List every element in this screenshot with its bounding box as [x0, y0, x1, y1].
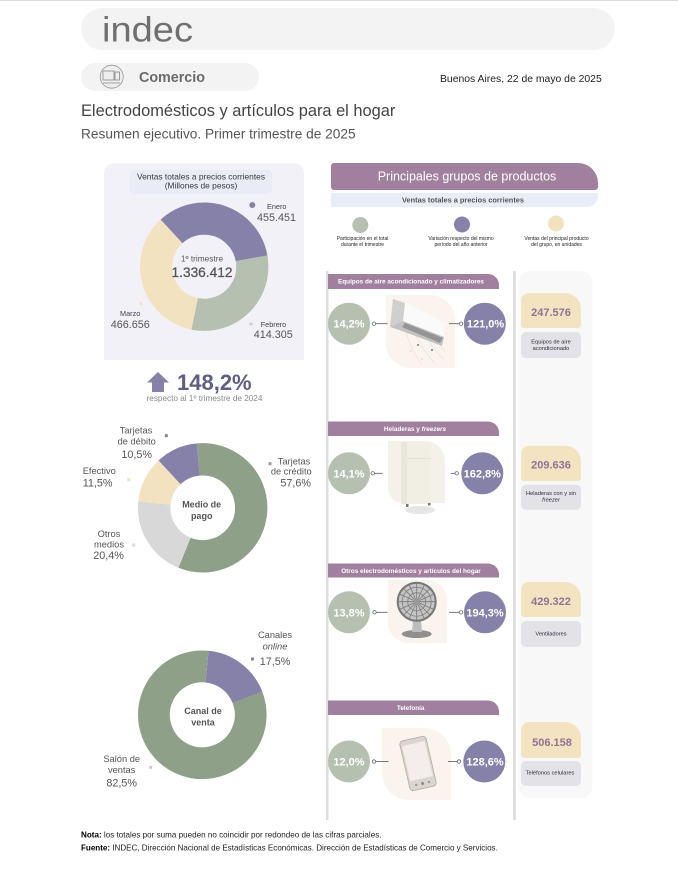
label: online channels: 17,5% [260, 656, 291, 668]
share value: 13,8% [333, 607, 365, 619]
key figure: year over year change [147, 370, 263, 403]
group: refrigerators [328, 422, 581, 514]
share value [328, 591, 370, 633]
product illustration: mobile phone [382, 728, 451, 800]
legend: units [524, 216, 589, 248]
logo: indec: indec [102, 10, 193, 50]
share value [328, 452, 370, 494]
label: debit cards: de débito [118, 436, 156, 446]
share value: 12,0% [333, 756, 365, 768]
unit sales card: 506.158 [532, 737, 572, 749]
connector left [372, 760, 388, 763]
icon: up arrow [147, 372, 169, 392]
share value: 14,1% [333, 468, 365, 480]
label: store sales: Salón de [103, 754, 140, 764]
legend: share [337, 217, 388, 248]
variation value [464, 303, 506, 345]
legend: units: del grupo, en unidades [531, 242, 582, 248]
connector right [448, 760, 461, 763]
unit sales card [521, 722, 581, 758]
label: credit cards: Tarjetas [278, 456, 311, 466]
group heading [328, 700, 499, 715]
variation value [464, 591, 506, 633]
donut center total [172, 254, 232, 280]
connector left [372, 322, 388, 325]
legend: share: Participación en el total [337, 236, 388, 242]
product name card [521, 332, 581, 358]
variation value [463, 740, 505, 782]
legend: variation: período del año anterior [434, 242, 488, 248]
column divider left [326, 271, 328, 820]
share value: 14,2% [333, 319, 365, 331]
group heading: Equipos de aire acondicionado y climatizadores [338, 278, 484, 286]
subtitle: Resumen ejecutivo. Primer trimestre de 2025 [81, 126, 356, 142]
product name card [521, 621, 581, 647]
share value [328, 740, 370, 782]
center label [182, 500, 221, 521]
title: Electrodomésticos y artículos para el hogar [81, 102, 396, 120]
heading: main product groups [331, 163, 598, 190]
source: Fuente: INDEC, Dirección Nacional de Estadísticas Económicas. Dirección de Estadísticas de Comercio y Servicios. [81, 844, 498, 852]
connector right [451, 472, 458, 475]
section tag: Comercio [81, 63, 259, 91]
group heading [328, 564, 499, 578]
date: Buenos Aires, 22 de mayo de 2025 [440, 74, 602, 85]
label: Marzo: 466.656 [111, 319, 150, 331]
variation value [461, 452, 503, 494]
center label: Canal de [184, 706, 222, 716]
growth value: 148,2% [177, 370, 252, 395]
variation value: 162,8% [464, 468, 501, 480]
panel heading: (Millones de pesos) [165, 180, 238, 190]
icon: appliances [100, 65, 123, 88]
label: debit cards [118, 426, 168, 461]
variation value: 194,3% [466, 607, 504, 619]
legend: units: Ventas del principal producto [524, 236, 589, 242]
product name card: Ventiladores [535, 632, 567, 638]
product name card [521, 485, 581, 510]
subheading: total sales: Ventas totales a precios corrientes [402, 196, 524, 204]
product name card [521, 761, 581, 786]
column divider right [513, 271, 516, 820]
donut chart: payment method [83, 426, 312, 576]
unit sales card: 429.322 [531, 596, 571, 608]
group heading: Otros electrodomésticos y artículos del hogar [341, 568, 481, 575]
label: credit cards: 57,6% [280, 478, 311, 490]
group: telephony [328, 700, 581, 800]
panel heading: Ventas totales a precios corrientes [137, 172, 265, 182]
variation value: 121,0% [467, 319, 504, 331]
group heading [328, 422, 499, 436]
label: Enero: 455.451 [257, 212, 296, 224]
label: Enero: Enero [267, 202, 286, 211]
center label: pago [191, 511, 213, 521]
label: cash: 11,5% [83, 478, 113, 490]
product name card: Heladeras con y sin [526, 491, 576, 497]
donut chart: sales channel [103, 630, 292, 790]
group heading: Telefonía [397, 705, 425, 712]
connector left [371, 472, 383, 475]
label: Enero [249, 202, 296, 224]
group: air conditioners [328, 274, 581, 368]
donut chart: monthly sales [136, 199, 272, 335]
label: cash: Efectivo [83, 466, 116, 476]
label: store sales: ventas [108, 765, 136, 775]
product name card: Equipos de aire [531, 340, 571, 346]
label: other: medios [94, 540, 124, 550]
center label: Medio de [182, 500, 221, 510]
group heading: Heladeras y freezers [384, 426, 447, 433]
subheading: total sales [331, 193, 598, 207]
connector right [449, 322, 463, 325]
product illustration: refrigerator [388, 441, 445, 514]
variation value: 128,6% [466, 756, 504, 768]
unit sales card: 209.636 [531, 460, 571, 472]
legend: variation [428, 216, 494, 248]
legend: share: durante el trimestre [341, 242, 384, 248]
footnote: Nota: los totales por suma pueden no coincidir por redondeo de las cifras parciales. [81, 830, 382, 840]
label: online channels: online [263, 642, 287, 652]
connector right [449, 611, 463, 614]
label: other: Otros [98, 529, 121, 539]
label: other [93, 529, 135, 562]
donut center total: 1º trimestre [181, 254, 223, 264]
label: debit cards: 10,5% [121, 449, 152, 461]
section name: Comercio [139, 70, 205, 86]
panel: unit sales background [518, 271, 592, 798]
label: credit cards: de crédito [271, 466, 312, 476]
unit sales card [521, 446, 581, 481]
center label: venta [191, 717, 216, 727]
header bar with logo [81, 8, 615, 50]
label: debit cards: Tarjetas [120, 426, 153, 436]
product illustration: fan [388, 580, 447, 643]
panel: total sales [104, 163, 304, 360]
label: store sales [103, 754, 152, 790]
label: Febrero: Febrero [261, 320, 286, 329]
center label [184, 706, 222, 727]
unit sales card [521, 293, 581, 328]
label: online channels [251, 630, 292, 668]
heading: main product groups: Principales grupos de productos [378, 170, 556, 184]
legend: variation: Variación respecto del mismo [428, 236, 494, 242]
unit sales card [521, 582, 581, 617]
group heading [328, 274, 499, 289]
group: other appliances [328, 564, 581, 647]
label: Febrero: 414.305 [254, 329, 293, 341]
growth caption: respecto al 1º trimestre de 2024 [147, 394, 263, 403]
panel heading [130, 170, 272, 194]
donut center total: 1.336.412 [172, 265, 232, 280]
label: Marzo: Marzo [120, 309, 140, 318]
label: credit cards [268, 456, 312, 490]
label: other: 20,4% [93, 550, 124, 562]
label: cash [83, 466, 130, 490]
product name card: acondicionado [533, 346, 569, 352]
product name card: Teléfonos celulares [526, 770, 574, 776]
product name card: freezer [542, 498, 561, 504]
label: store sales: 82,5% [106, 778, 137, 790]
unit sales card: 247.576 [531, 307, 571, 319]
connector left [373, 611, 388, 614]
label: Marzo [111, 302, 150, 331]
share value [328, 303, 370, 345]
label: Febrero [250, 320, 293, 341]
product illustration: air conditioner [386, 295, 455, 368]
label: online channels: Canales [258, 630, 292, 640]
legend [337, 216, 589, 248]
